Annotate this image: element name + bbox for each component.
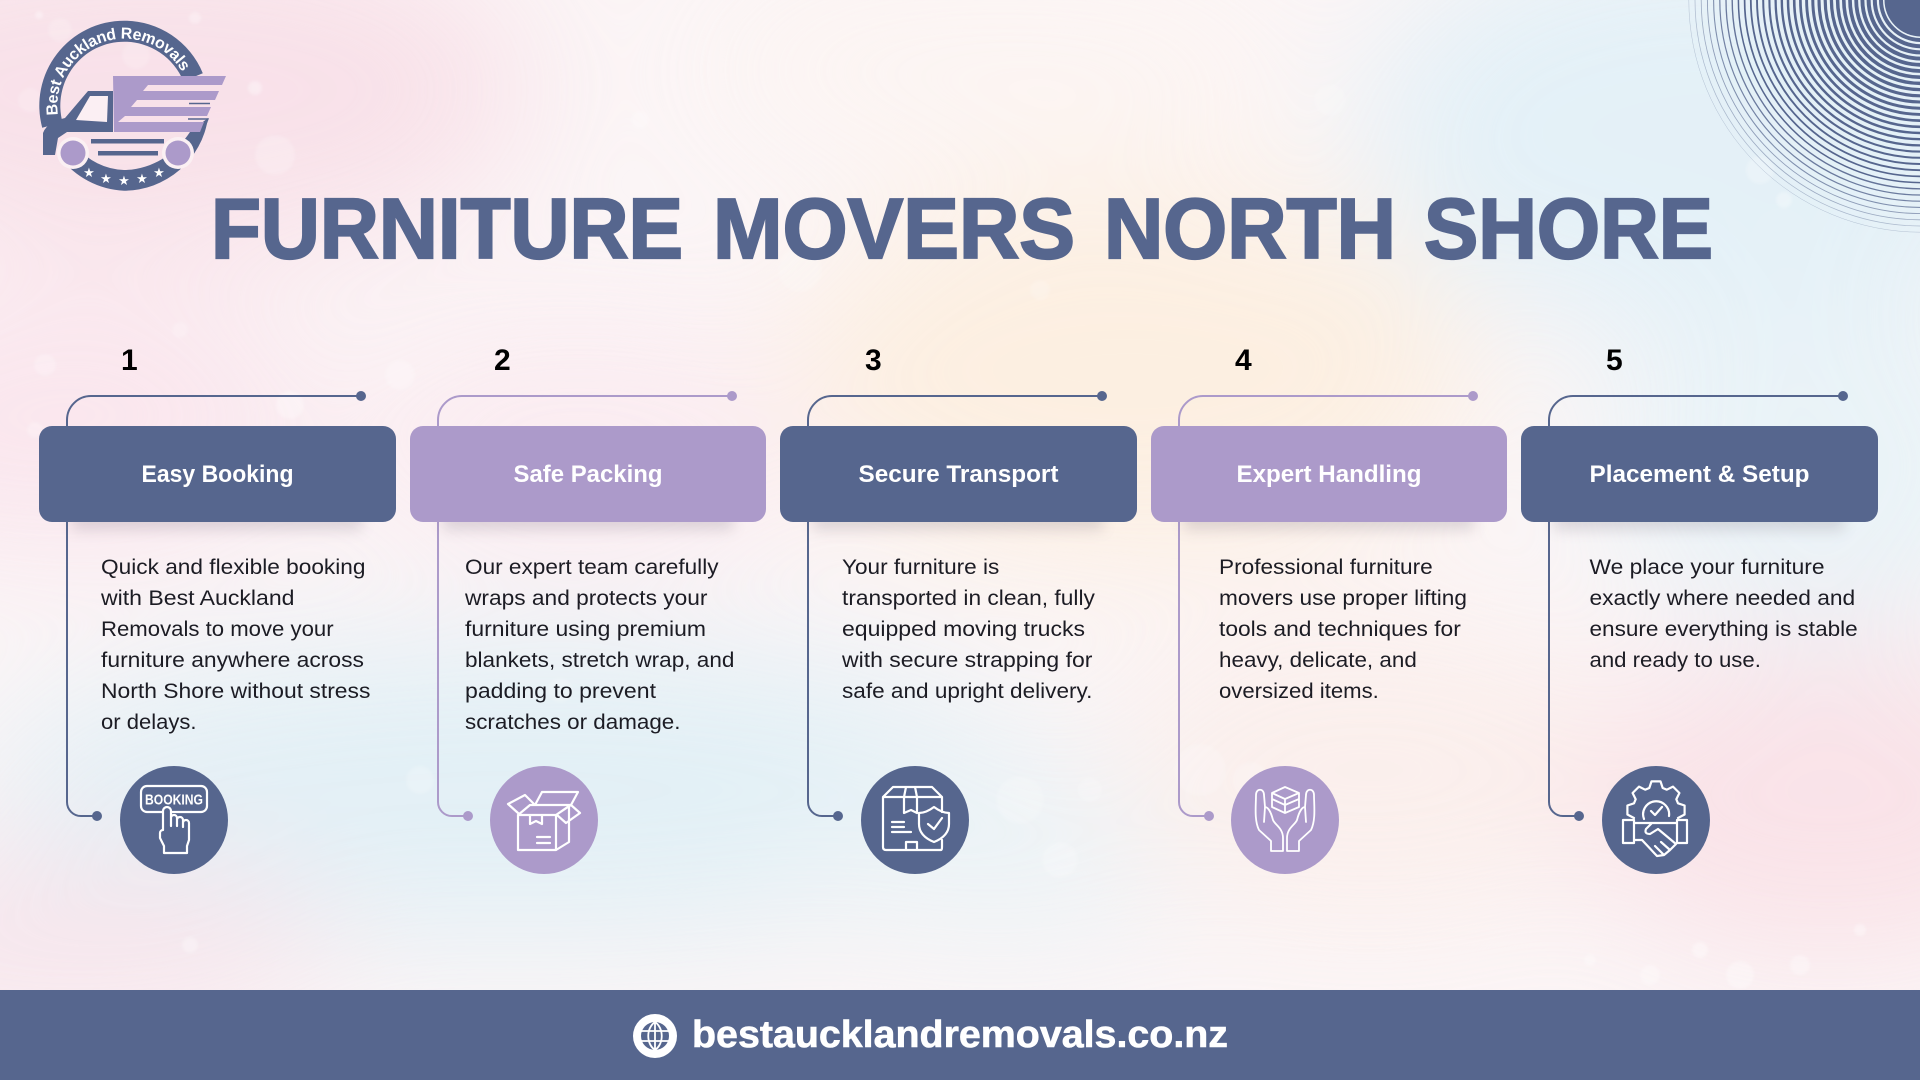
- description 2: [464, 555, 734, 734]
- icon: hands holding box: [1231, 766, 1339, 874]
- description 5: ensure everything is stable: [1590, 617, 1858, 641]
- description 5: and ready to use.: [1590, 648, 1761, 672]
- connector top: [67, 392, 365, 428]
- logo: Best Auckland Removals: [39, 20, 226, 191]
- header: Placement & Setup: [1521, 426, 1878, 522]
- header: Easy Booking: [39, 426, 396, 522]
- title: SHORE: [1424, 182, 1713, 277]
- description 2: Our expert team carefully: [465, 555, 719, 579]
- logo stars: ★: [100, 172, 112, 187]
- description 3: Your furniture is: [842, 555, 999, 579]
- header: Secure Transport: [780, 426, 1137, 522]
- description 5: We place your furniture: [1590, 555, 1824, 579]
- logo stars: ★: [83, 166, 95, 181]
- title: NORTH: [1104, 182, 1396, 277]
- step number 3: 3: [865, 344, 882, 377]
- step 2 column: [410, 344, 766, 874]
- description 5: exactly where needed and: [1590, 586, 1855, 610]
- header: Safe Packing: Safe Packing: [514, 461, 662, 488]
- header: Expert Handling: Expert Handling: [1236, 461, 1422, 488]
- description 2: furniture using premium: [465, 617, 706, 641]
- icon: gear and handshake: [1602, 766, 1710, 874]
- logo chassis bars: [91, 139, 164, 156]
- step number 4: 4: [1235, 344, 1252, 377]
- description 3: equipped moving trucks: [842, 617, 1085, 641]
- connector top: [808, 392, 1106, 428]
- header: Expert Handling: [1151, 426, 1507, 522]
- logo wheels: [57, 137, 194, 169]
- title: FURNITURE: [211, 182, 683, 277]
- description 2: padding to prevent: [465, 679, 656, 703]
- title: [211, 182, 1713, 277]
- description 3: [841, 555, 1095, 703]
- icon: booking button and hand: [120, 766, 228, 874]
- logo ring bottom arc: [60, 118, 208, 191]
- header: Easy Booking: Easy Booking: [142, 461, 294, 488]
- connector top: [1549, 392, 1847, 428]
- connector top: [1179, 392, 1477, 428]
- connector bottom: [438, 520, 472, 820]
- header: Placement & Setup: Placement & Setup: [1590, 461, 1810, 488]
- header: Safe Packing: [410, 426, 766, 522]
- icon: open box: [490, 766, 598, 874]
- step 1 column: [39, 344, 396, 874]
- decorative concentric rings: [1689, 0, 1920, 232]
- description 4: oversized items.: [1219, 679, 1379, 703]
- step number 5: 5: [1606, 344, 1623, 377]
- header: Secure Transport: Secure Transport: [858, 461, 1059, 488]
- logo stars: ★: [118, 174, 130, 189]
- icon: globe: [633, 1014, 677, 1058]
- description 5: [1590, 555, 1858, 672]
- connector bottom: [808, 520, 842, 820]
- website url: bestaucklandremovals.co.nz: [692, 1014, 1228, 1056]
- step 4 column: [1151, 344, 1507, 874]
- description 1: with Best Auckland: [100, 586, 294, 610]
- logo stars: ★: [136, 172, 148, 187]
- description 2: wraps and protects your: [464, 586, 708, 610]
- step number 2: 2: [494, 344, 511, 377]
- description 1: Quick and flexible booking: [101, 555, 366, 579]
- icon: box with shield: [861, 766, 969, 874]
- description 1: North Shore without stress: [101, 679, 370, 703]
- step 3 column: [780, 344, 1137, 874]
- step 5 column: [1521, 344, 1878, 874]
- description 1: or delays.: [101, 710, 196, 734]
- connector bottom: [67, 520, 101, 820]
- icon: booking button and hand: BOOKING: [145, 792, 203, 808]
- logo curved name: Best Auckland Removals: [46, 28, 188, 115]
- description 4: Professional furniture: [1219, 555, 1433, 579]
- logo truck cab: [43, 91, 113, 155]
- logo ring top arc: [39, 21, 203, 128]
- description 4: heavy, delicate, and: [1219, 648, 1417, 672]
- description 4: [1219, 555, 1467, 703]
- logo truck cargo: [113, 76, 226, 132]
- description 3: transported in clean, fully: [842, 586, 1095, 610]
- connector top: [438, 392, 736, 428]
- description 1: Removals to move your: [101, 617, 334, 641]
- logo stars: ★: [153, 166, 165, 181]
- description 1: [100, 555, 370, 734]
- description 4: tools and techniques for: [1219, 617, 1461, 641]
- description 3: with secure strapping for: [841, 648, 1092, 672]
- description 3: safe and upright delivery.: [842, 679, 1092, 703]
- connector bottom: [1179, 520, 1213, 820]
- footer bar: [0, 990, 1920, 1080]
- description 2: scratches or damage.: [465, 710, 680, 734]
- description 4: movers use proper lifting: [1219, 586, 1467, 610]
- description 1: furniture anywhere across: [101, 648, 364, 672]
- step number 1: 1: [121, 344, 138, 377]
- description 2: blankets, stretch wrap, and: [465, 648, 734, 672]
- connector bottom: [1549, 520, 1583, 820]
- title: MOVERS: [713, 182, 1075, 277]
